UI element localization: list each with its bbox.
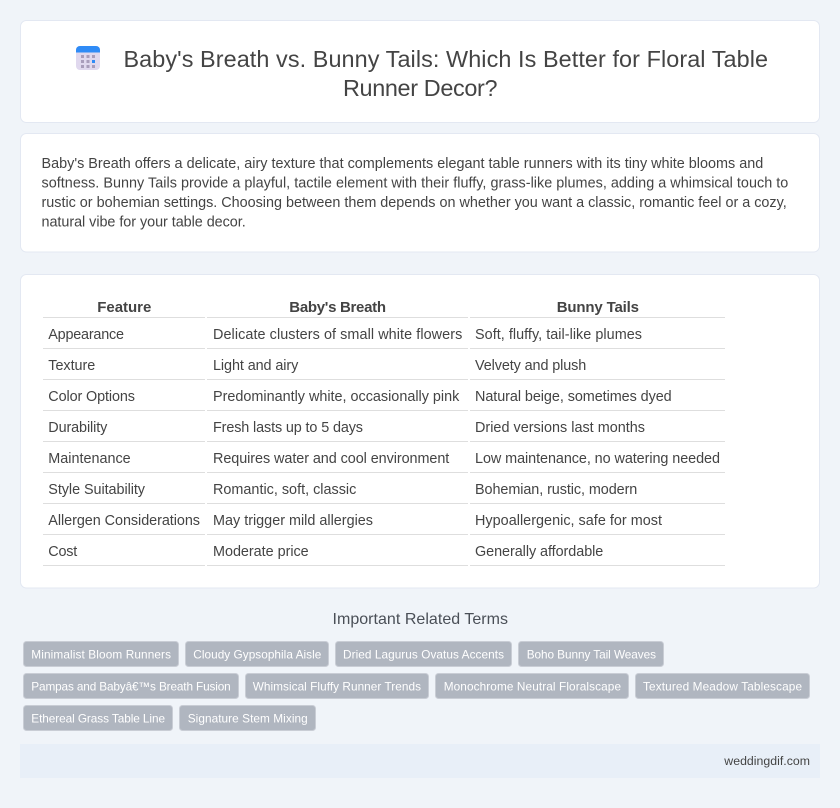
tag: textured meadow tablescape: Textured Meadow Tablescape: [643, 679, 802, 693]
row: allergen considerations: May trigger mild allergies: [213, 513, 373, 529]
intro text: rustic or bohemian settings. Choosing between them depends on whether you want a classic, romantic feel or a cozy,: [42, 195, 787, 211]
row: texture: [48, 358, 586, 374]
row: style suitability: Bohemian, rustic, modern: [475, 482, 637, 498]
tag: pampas fusion: [24, 674, 238, 698]
row: color options: Natural beige, sometimes dyed: [475, 389, 672, 405]
tag: ethereal grass table line: Ethereal Grass Table Line: [31, 711, 165, 725]
footer: weddingdif.com: [723, 754, 810, 768]
row: durability: Fresh lasts up to 5 days: [213, 420, 363, 436]
footer: [20, 744, 820, 778]
tag: dried lagurus ovatus accents: Dried Lagurus Ovatus Accents: [343, 647, 504, 661]
tag: minimalist bloom runners: Minimalist Bloom Runners: [31, 647, 171, 661]
table header: Baby's Breath: [289, 299, 386, 316]
title: Baby's Breath vs. Bunny Tails: Which Is Better for Floral Table: [124, 46, 768, 72]
row: cost: Cost: [48, 544, 77, 560]
row: durability: Durability: [48, 420, 108, 436]
header panel: [20, 20, 820, 122]
row: texture: Light and airy: [213, 358, 299, 374]
row: appearance: Soft, fluffy, tail-like plumes: [475, 327, 642, 343]
row: durability: [48, 420, 645, 436]
row: durability: Dried versions last months: [475, 420, 645, 436]
tag: cloudy gypsophila aisle: [186, 642, 328, 666]
table rules: [43, 317, 725, 566]
related term tags: [24, 642, 810, 730]
row: maintenance: [48, 451, 720, 467]
row: cost: Moderate price: [213, 544, 309, 560]
tag: monochrome neutral floralscape: Monochrome Neutral Floralscape: [444, 679, 621, 693]
table header: [97, 299, 639, 316]
row: appearance: [48, 327, 642, 343]
row: color options: Color Options: [48, 389, 135, 405]
tag: dried lagurus ovatus accents: [336, 642, 512, 666]
panel: introduction: [20, 134, 820, 252]
tag: whimsical fluffy runner trends: Whimsical Fluffy Runner Trends: [253, 679, 421, 693]
tag: signature stem mixing: [180, 706, 316, 730]
table header: Feature: [97, 299, 151, 316]
tag: cloudy gypsophila aisle: Cloudy Gypsophila Aisle: [193, 647, 322, 661]
row: appearance: Appearance: [48, 327, 124, 343]
tag: whimsical fluffy runner trends: [246, 674, 428, 698]
table header: Bunny Tails: [557, 299, 639, 316]
row: style suitability: Romantic, soft, classic: [213, 482, 356, 498]
intro text: natural vibe for your table decor.: [42, 214, 246, 230]
row: cost: [48, 544, 603, 560]
row: texture: Velvety and plush: [475, 358, 586, 374]
tag: pampas fusion: Pampas and Babyâ€™s Breath Fusion: [31, 679, 231, 693]
row: appearance: Delicate clusters of small white flowers: [213, 327, 462, 343]
tag: monochrome neutral floralscape: [436, 674, 628, 698]
tag: boho bunny tail weaves: Boho Bunny Tail Weaves: [527, 647, 656, 661]
row: texture: Texture: [48, 358, 95, 374]
tag: ethereal grass table line: [24, 706, 172, 730]
icon: calendar: [76, 46, 100, 70]
intro text: [42, 156, 788, 230]
tag: signature stem mixing: Signature Stem Mixing: [188, 711, 308, 725]
row: style suitability: Style Suitability: [48, 482, 146, 498]
row: color options: Predominantly white, occasionally pink: [213, 389, 460, 405]
related terms heading: Important Related Terms: [332, 611, 508, 628]
title: [124, 46, 768, 101]
intro text: Baby's Breath offers a delicate, airy texture that complements elegant table runners with its tiny white blooms and: [42, 156, 763, 172]
row: cost: Generally affordable: [475, 544, 603, 560]
tag: minimalist bloom runners: [24, 642, 178, 666]
row: maintenance: Low maintenance, no watering needed: [475, 451, 720, 467]
row: maintenance: Maintenance: [48, 451, 131, 467]
intro text: softness. Bunny Tails provide a playful, tactile element with their fluffy, grass-like plumes, adding a whimsical touch to: [42, 176, 788, 192]
row: allergen considerations: Hypoallergenic, safe for most: [475, 513, 662, 529]
tag: boho bunny tail weaves: [518, 642, 664, 666]
row: color options: [48, 389, 672, 405]
title: Runner Decor?: [343, 75, 498, 101]
row: maintenance: Requires water and cool environment: [213, 451, 449, 467]
row: allergen considerations: Allergen Considerations: [48, 513, 200, 529]
tag: textured meadow tablescape: [636, 674, 810, 698]
row: allergen considerations: [48, 513, 662, 529]
row: style suitability: [48, 482, 637, 498]
panel: comparison table: [20, 274, 820, 588]
